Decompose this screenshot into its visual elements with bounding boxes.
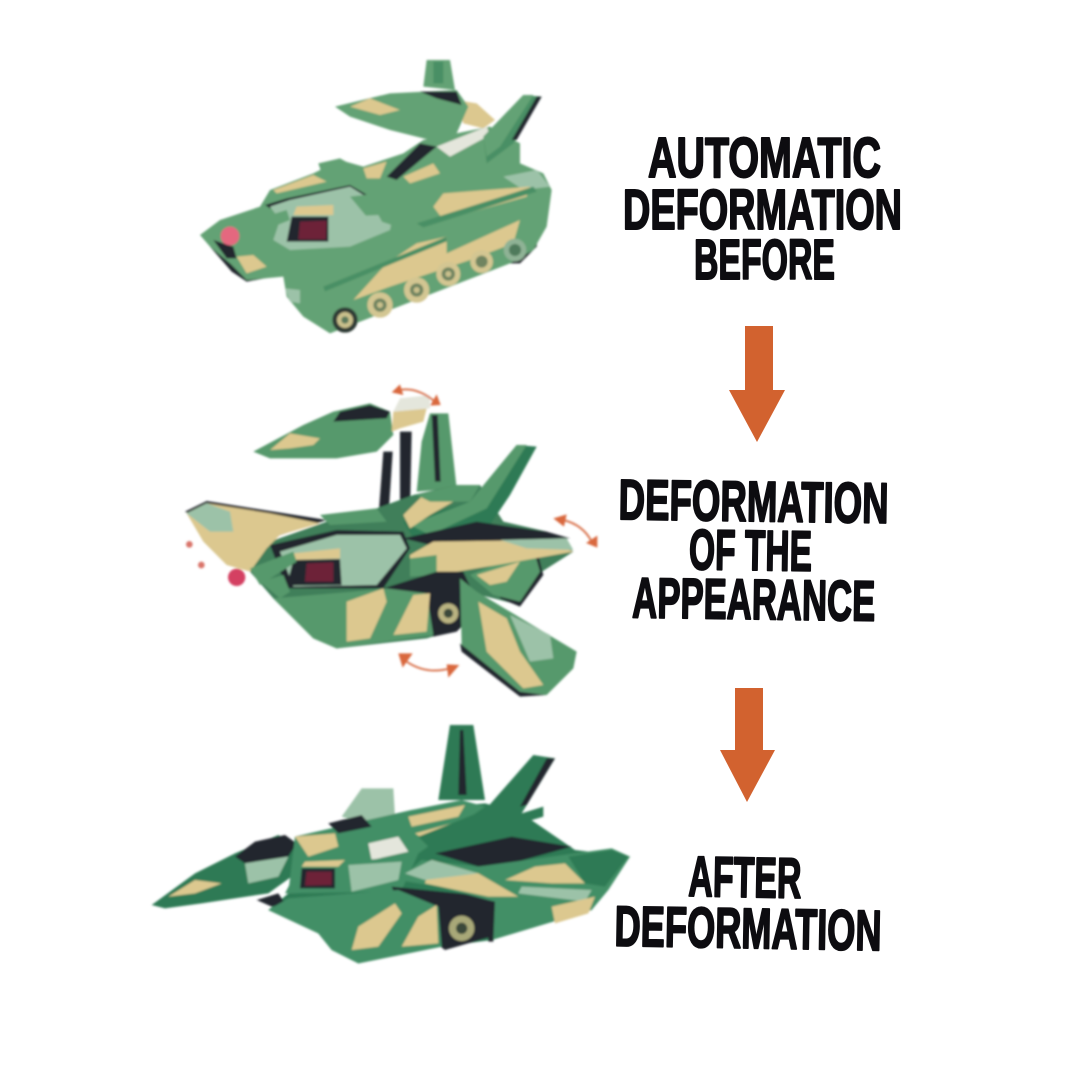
heading: after deformation [614, 844, 883, 963]
vehicle: tank before deformation [200, 60, 552, 333]
vehicle: mid-transformation [185, 384, 597, 697]
heading: automatic deformation before: BEFORE [694, 228, 835, 292]
heading: deformation of the appearance: APPEARANCE [632, 566, 876, 634]
heading: deformation of the appearance: OF THE [689, 518, 812, 584]
arrow: down to deformation [729, 326, 785, 442]
heading: automatic deformation before: DEFORMATION [623, 178, 902, 242]
heading: after deformation: DEFORMATION [614, 895, 882, 963]
heading: deformation of the appearance [617, 468, 889, 634]
heading: after deformation: AFTER [688, 845, 802, 911]
vehicle: jet after deformation [152, 725, 630, 963]
heading: automatic deformation before: AUTOMATIC [648, 126, 881, 190]
arrow: down to after [720, 688, 775, 802]
heading: deformation of the appearance: DEFORMATION [618, 468, 889, 536]
heading: automatic deformation before [623, 126, 902, 292]
